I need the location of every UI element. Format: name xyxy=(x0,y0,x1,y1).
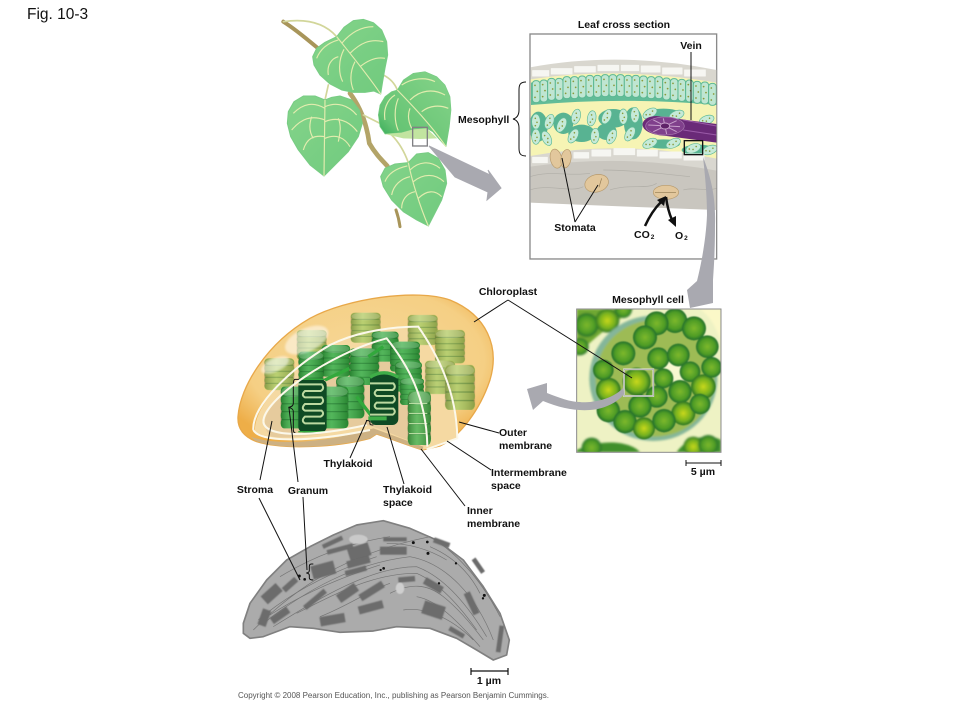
cut granum front xyxy=(408,391,431,445)
scale bar: 1 µm: 1 µm xyxy=(477,675,501,687)
granum bracket xyxy=(306,564,313,580)
chloroplasts xyxy=(593,308,722,439)
label: outer membrane xyxy=(459,422,552,452)
cut granum left xyxy=(298,379,327,433)
label: stomata: Stomata xyxy=(554,222,596,234)
leaf: lower xyxy=(381,153,447,226)
label: inner membrane xyxy=(421,449,520,530)
arrow: mesophyll cell to chloroplast xyxy=(527,383,624,410)
chloroplast cutaway diagram xyxy=(238,295,493,450)
membrane lines xyxy=(253,327,457,449)
O2 arrow and label: O xyxy=(675,230,683,242)
intermembrane cut surface xyxy=(255,327,457,450)
pale stroma spots xyxy=(349,535,368,544)
scale bar: 1 µm xyxy=(471,668,508,687)
label: intermembrane space: Intermembrane xyxy=(491,467,567,479)
CO2 arrow and label: CO xyxy=(634,229,650,241)
CO2 arrow and label xyxy=(634,196,666,241)
cut granum right xyxy=(368,373,398,425)
central cell body xyxy=(589,316,717,441)
label: inner membrane: membrane xyxy=(467,518,520,530)
panel: mesophyll cell micrograph xyxy=(576,308,722,453)
scale bar: 5 µm xyxy=(686,460,721,478)
stroma lamellae xyxy=(253,537,500,647)
label: outer membrane: membrane xyxy=(499,440,552,452)
vein xyxy=(643,116,717,143)
thylakoid and granum brackets xyxy=(288,379,373,434)
label: chloroplast: Chloroplast xyxy=(479,286,538,298)
label: mesophyll cell: Mesophyll cell xyxy=(612,294,684,306)
stomata xyxy=(548,148,679,199)
label: stomata xyxy=(554,158,598,234)
faded grana xyxy=(264,312,475,410)
lower leaf surface xyxy=(530,148,717,210)
soft highlights xyxy=(281,320,333,360)
arrow: cross section to mesophyll cell xyxy=(687,157,715,308)
label: outer membrane: Outer xyxy=(499,427,527,439)
O2 arrow and label: 2 xyxy=(684,235,688,242)
leaf branch illustration xyxy=(283,19,451,227)
grana in stroma xyxy=(281,331,424,428)
O2 arrow and label xyxy=(666,197,688,242)
label: leaf cross section: Leaf cross section xyxy=(578,19,670,31)
label: stroma: Stroma xyxy=(237,484,273,496)
upper epidermis xyxy=(530,60,717,83)
label: intermembrane space: space xyxy=(491,480,521,492)
label: thylakoid space: space xyxy=(383,497,413,509)
copyright line: Copyright © 2008 Pearson Education, Inc., publishing as Pearson Benjamin Cummings. xyxy=(238,691,549,700)
label: mesophyll: Mesophyll xyxy=(458,114,509,126)
mesophyll background xyxy=(530,71,717,163)
panel frame xyxy=(530,34,717,259)
electron micrograph of chloroplast xyxy=(243,521,509,660)
leaf: top xyxy=(313,19,388,94)
panel: leaf cross section xyxy=(529,34,719,259)
neighbouring cells xyxy=(577,309,633,357)
figure label: Fig. 10-3 xyxy=(27,6,88,23)
label: vein xyxy=(680,40,702,120)
label: thylakoid: Thylakoid xyxy=(323,458,373,470)
label: thylakoid space xyxy=(383,427,432,509)
label: intermembrane space xyxy=(447,441,567,492)
label: inner membrane: Inner xyxy=(467,505,493,517)
label: vein: Vein xyxy=(680,40,702,52)
arrow: leaf to cross section xyxy=(429,146,501,200)
photo frame xyxy=(577,309,721,452)
label: stroma xyxy=(237,421,300,580)
CO2 arrow and label: 2 xyxy=(651,234,655,241)
branch stem xyxy=(283,21,408,227)
label: chloroplast xyxy=(474,286,632,378)
leaf: right folded xyxy=(378,72,451,147)
mesophyll brace xyxy=(513,82,526,156)
label: thylakoid space: Thylakoid xyxy=(383,484,432,496)
grana stacks xyxy=(257,536,504,653)
outer envelope xyxy=(238,295,493,450)
plastoglobuli dots xyxy=(298,541,486,599)
micrograph body xyxy=(243,521,509,660)
label: thylakoid xyxy=(323,420,373,470)
zoom square on leaf xyxy=(413,127,427,146)
palisade cells xyxy=(531,75,717,105)
vein zoom box xyxy=(684,141,703,155)
chloroplast zoom square xyxy=(624,369,653,396)
label: granum: Granum xyxy=(288,485,328,497)
inner stroma region xyxy=(265,338,427,447)
leaf: left xyxy=(287,96,362,176)
scale bar: 5 µm: 5 µm xyxy=(691,466,715,478)
spongy mesophyll cells xyxy=(529,106,719,157)
label: granum xyxy=(288,408,328,570)
